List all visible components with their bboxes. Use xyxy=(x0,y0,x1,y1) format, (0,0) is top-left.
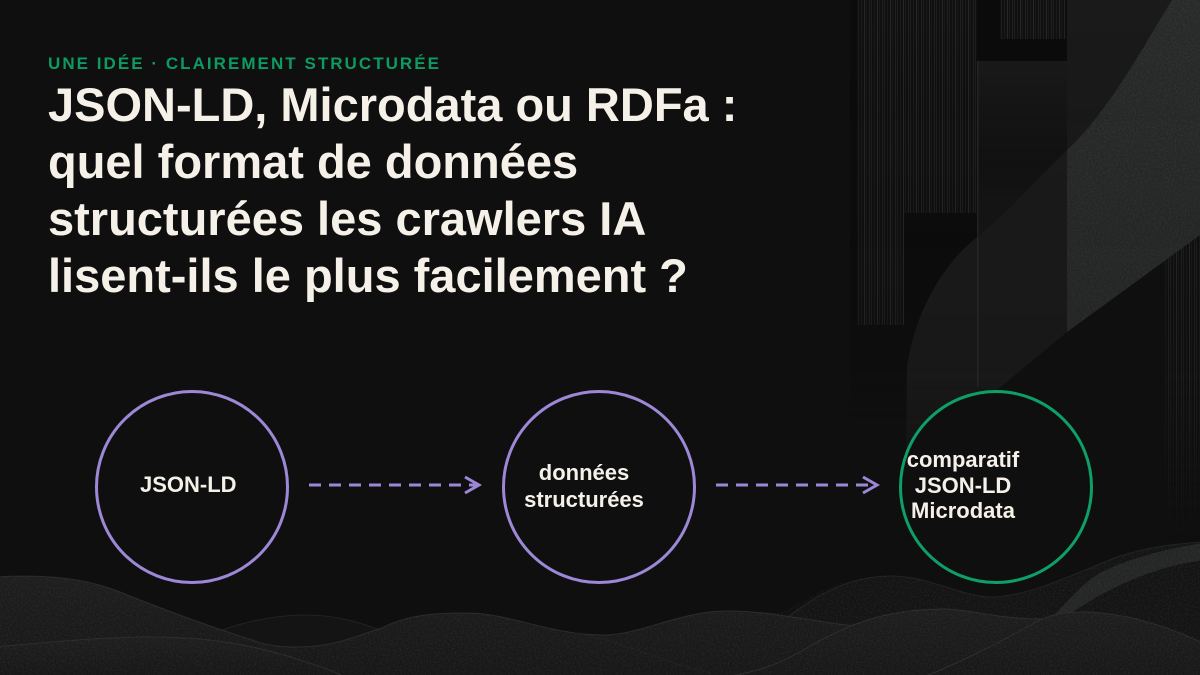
title: JSON-LD, Microdata ou RDFa : xyxy=(48,78,737,131)
node label: données structurées: structurées xyxy=(524,487,644,512)
node label: données structurées: données xyxy=(539,460,629,485)
eyebrow label: UNE IDÉE · CLAIREMENT STRUCTURÉE xyxy=(48,54,441,73)
title: quel format de données xyxy=(48,135,578,188)
title: structurées les crawlers IA xyxy=(48,192,646,245)
arrow: données structurées to comparatif xyxy=(716,476,880,494)
node: JSON-LD circle xyxy=(95,390,289,584)
node: comparatif circle xyxy=(899,390,1093,584)
top-right architectural shapes xyxy=(858,0,1200,465)
back hills xyxy=(200,542,1200,675)
arrow: JSON-LD to données structurées xyxy=(309,476,482,494)
node label: comparatif JSON-LD Microdata: JSON-LD xyxy=(915,472,1011,498)
main hills xyxy=(0,576,1200,675)
node label: comparatif JSON-LD Microdata: Microdata xyxy=(911,498,1015,523)
title xyxy=(48,78,737,302)
node label: comparatif JSON-LD Microdata xyxy=(907,447,1020,523)
ribbon on the right xyxy=(1050,543,1200,619)
bottom wave landscape xyxy=(0,540,1200,675)
node label: JSON-LD: JSON-LD xyxy=(140,472,237,497)
node label: comparatif JSON-LD Microdata: comparatif xyxy=(907,447,1019,472)
node: données structurées circle xyxy=(502,390,696,584)
title: lisent-ils le plus facilement ? xyxy=(48,249,688,302)
flow diagram xyxy=(95,390,1093,584)
node label: données structurées xyxy=(524,460,644,512)
